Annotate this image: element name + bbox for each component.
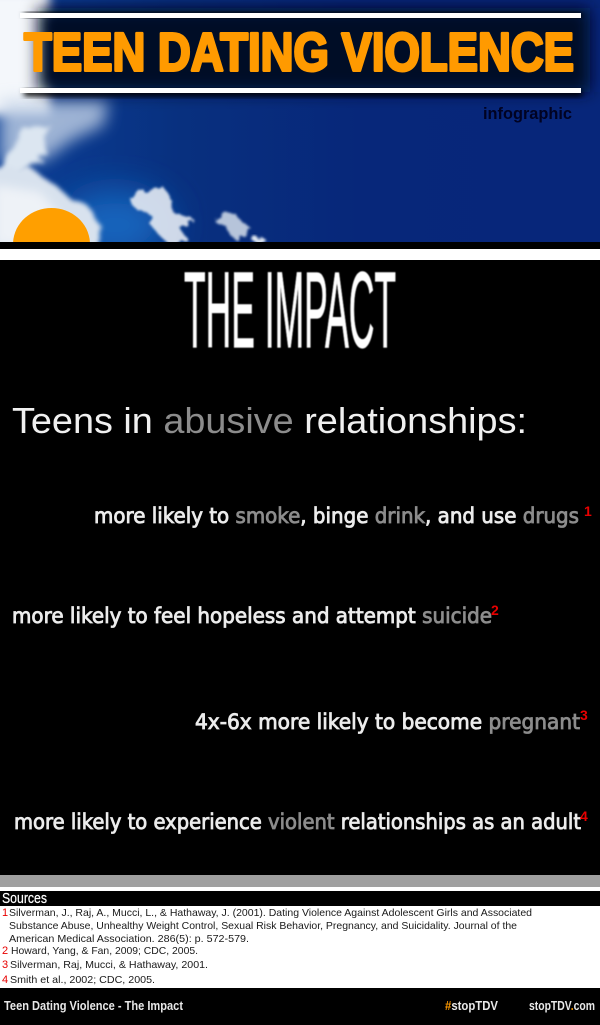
title rule bottom [20,88,581,93]
cloud: middle wisp [129,186,194,245]
header sky panel [0,0,600,260]
cloud: left bank [0,0,108,248]
sources heading bar: Sources [2,890,47,907]
footnote marker 4: 4 [580,808,588,824]
footer bar [0,988,600,1025]
subtitle: infographic: infographic [483,104,572,123]
footer hashtag: #stopTDV [445,999,499,1013]
source 4: 4 [2,974,8,986]
source 4: Smith et al., 2002; CDC, 2005. [10,974,155,986]
footnote marker 3: 3 [580,707,588,723]
source 2: Howard, Yang, & Fan, 2009; CDC, 2005. [11,945,198,957]
footer website: stopTDV.com [529,999,595,1013]
footer title: Teen Dating Violence - The Impact [4,999,184,1013]
footnote marker 2: 2 [491,602,499,618]
statement 1: more likely to smoke, binge drink, and use drugs [94,504,579,528]
white separator [0,249,600,260]
source 3: Silverman, Raj, Mucci, & Hathaway, 2001. [10,959,208,971]
cloud: small wisp [216,211,251,241]
source 1 [2,907,532,945]
sources panel [0,887,600,988]
horizon black bar [0,242,600,249]
title rule shadow [24,13,582,17]
source 1: American Medical Association. 286(5): p. 572-579. [9,933,249,945]
sun [13,208,90,243]
source 1: Substance Abuse, Unhealthy Weight Control, Sexual Risk Behavior, Pregnancy, and Suicidality. Journal of the [9,920,517,932]
gray divider band [0,875,600,887]
source 1: 1 [2,907,8,919]
title dark glow band [38,8,590,92]
sources heading bar [0,890,600,907]
footnote marker 1: 1 [584,503,592,519]
main black panel [0,260,600,875]
statement 2: more likely to feel hopeless and attempt suicide [12,604,492,628]
lead sentence: Teens in abusive relationships: [12,400,527,441]
source 3: 3 [2,959,8,971]
title rule top [20,13,581,18]
cloud: tiny wisp [253,236,265,244]
source 1: Silverman, J., Raj, A., Mucci, L., & Hathaway, J. (2001). Dating Violence Against Adolescent Girls and Associated [9,907,532,919]
source 2: 2 [2,945,8,957]
statement 3: 4x-6x more likely to become pregnant [195,710,580,734]
statement 4: more likely to experience violent relationships as an adult [14,810,581,834]
